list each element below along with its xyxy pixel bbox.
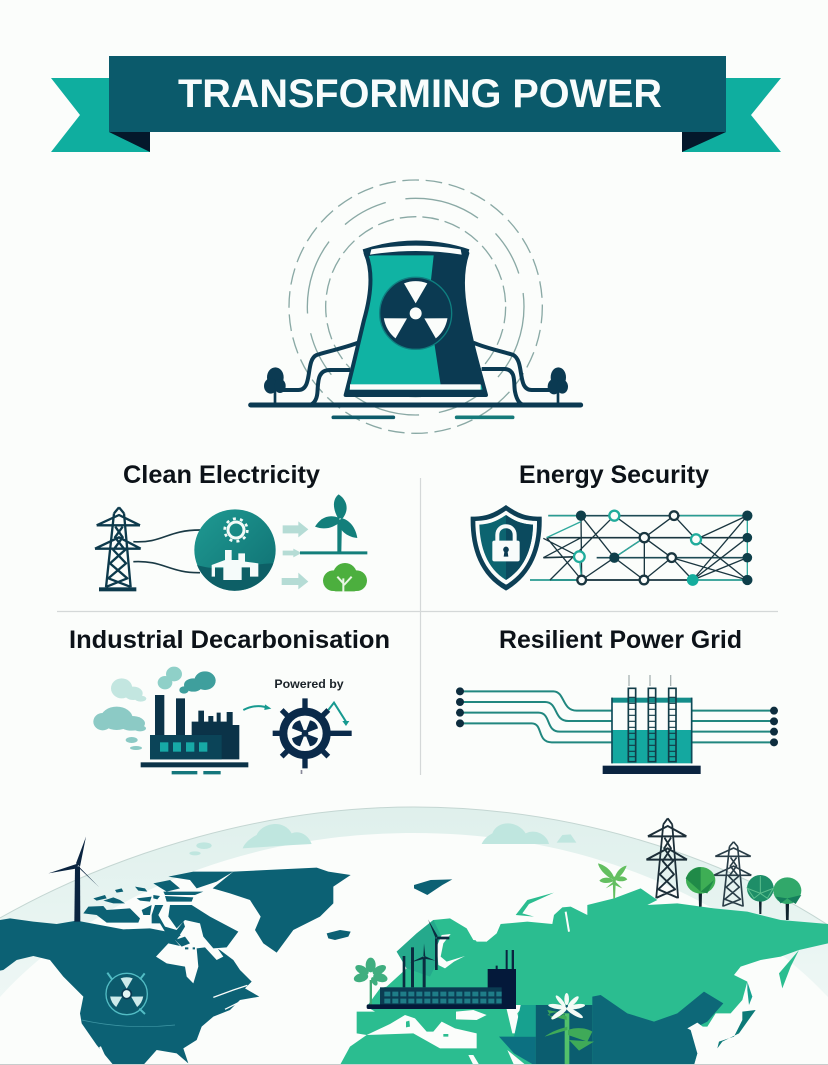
signal rings — [289, 180, 542, 433]
banner main strip — [109, 56, 726, 132]
icon: pylon — [95, 507, 141, 591]
europe landmass — [340, 918, 570, 1065]
powered by label: Powered by — [274, 678, 344, 691]
icon: turbine on north america — [48, 837, 99, 922]
eastern hemisphere — [414, 818, 828, 1065]
red sea gap — [506, 1005, 524, 1033]
panel: clean electricity — [95, 461, 367, 592]
icon: shield with padlock — [471, 505, 542, 591]
icon: wind turbine — [300, 494, 367, 554]
pylon 2 — [714, 842, 751, 907]
left tree — [264, 367, 286, 405]
tower rim — [363, 240, 469, 257]
eurasia — [497, 888, 828, 1065]
flow arrows — [282, 521, 308, 589]
clouds — [189, 824, 312, 855]
tower shaded side — [431, 253, 484, 385]
tree 3 — [773, 877, 801, 920]
north america — [0, 918, 259, 1065]
heading: energy security: Energy Security — [519, 461, 709, 489]
panel: industrial decarbonisation — [69, 626, 390, 774]
energy security icons — [471, 505, 751, 591]
gulf detail — [213, 985, 247, 1009]
banner right tail — [682, 78, 781, 152]
european seas — [367, 930, 490, 1065]
smoke clouds — [93, 667, 216, 750]
network nodes — [574, 511, 751, 585]
heading: industrial decarbonisation: Industrial Decarbonisation — [69, 626, 390, 654]
greenland — [213, 868, 351, 953]
western hemisphere — [0, 824, 351, 1065]
title: TRANSFORMING POWER — [178, 72, 662, 116]
heading: clean electricity: Clean Electricity — [123, 461, 320, 489]
europe — [340, 918, 570, 1065]
icon: factory — [141, 695, 248, 774]
network lines — [530, 516, 747, 580]
icon: green bush — [323, 563, 367, 592]
icon: turbine gear — [273, 698, 352, 774]
icon: radiation badge — [106, 973, 147, 1015]
resilient power grid icons — [456, 675, 778, 774]
svalbard — [414, 879, 452, 895]
tower base band — [347, 384, 484, 395]
grid lines — [460, 691, 774, 742]
pylon 1 — [646, 818, 687, 898]
clouds — [482, 823, 576, 844]
grid end nodes — [456, 687, 778, 746]
bottom edge line — [0, 1064, 828, 1065]
mediterranean islands — [406, 1021, 448, 1037]
novaya zemlya — [516, 893, 554, 917]
substation tank — [603, 675, 701, 774]
hudson bay and arctic islands — [83, 872, 238, 983]
right tree — [548, 367, 568, 405]
hero: cooling tower illustration — [251, 180, 581, 433]
banner folds — [109, 132, 726, 152]
globe atmosphere band — [0, 807, 828, 997]
clean electricity icons — [95, 494, 367, 592]
sakhalin — [779, 950, 799, 988]
world map — [0, 807, 828, 1065]
wires — [133, 530, 200, 573]
panel: resilient power grid — [456, 626, 778, 774]
tree 2 — [747, 875, 774, 914]
small palm — [598, 863, 627, 899]
globe rim line — [0, 807, 828, 925]
europe overlay: factory, turbines, palm — [353, 919, 516, 1009]
palm on europe — [353, 958, 389, 1005]
radiation symbol — [380, 277, 452, 349]
quadrant dividers — [57, 478, 778, 775]
title banner — [51, 56, 781, 152]
arrow to gear — [243, 704, 271, 710]
factory on map — [367, 950, 516, 1009]
pipes — [280, 343, 553, 405]
korea gap — [687, 1023, 716, 1048]
ob gulf — [566, 912, 569, 932]
tree 1 — [686, 867, 715, 907]
banner left tail — [51, 78, 150, 152]
turbines on europe — [403, 919, 449, 987]
ground lines — [251, 405, 581, 417]
white flower plant — [545, 993, 594, 1065]
icon: power plant circle — [194, 509, 276, 591]
scandinavia shade — [397, 920, 440, 977]
asia dark region — [499, 992, 723, 1065]
iceland — [327, 930, 351, 940]
heading: resilient power grid: Resilient Power Grid — [499, 626, 742, 654]
panel: energy security — [471, 461, 751, 591]
japan — [717, 1010, 756, 1048]
industrial decarbonisation icons — [93, 667, 352, 774]
tower body — [346, 253, 486, 395]
